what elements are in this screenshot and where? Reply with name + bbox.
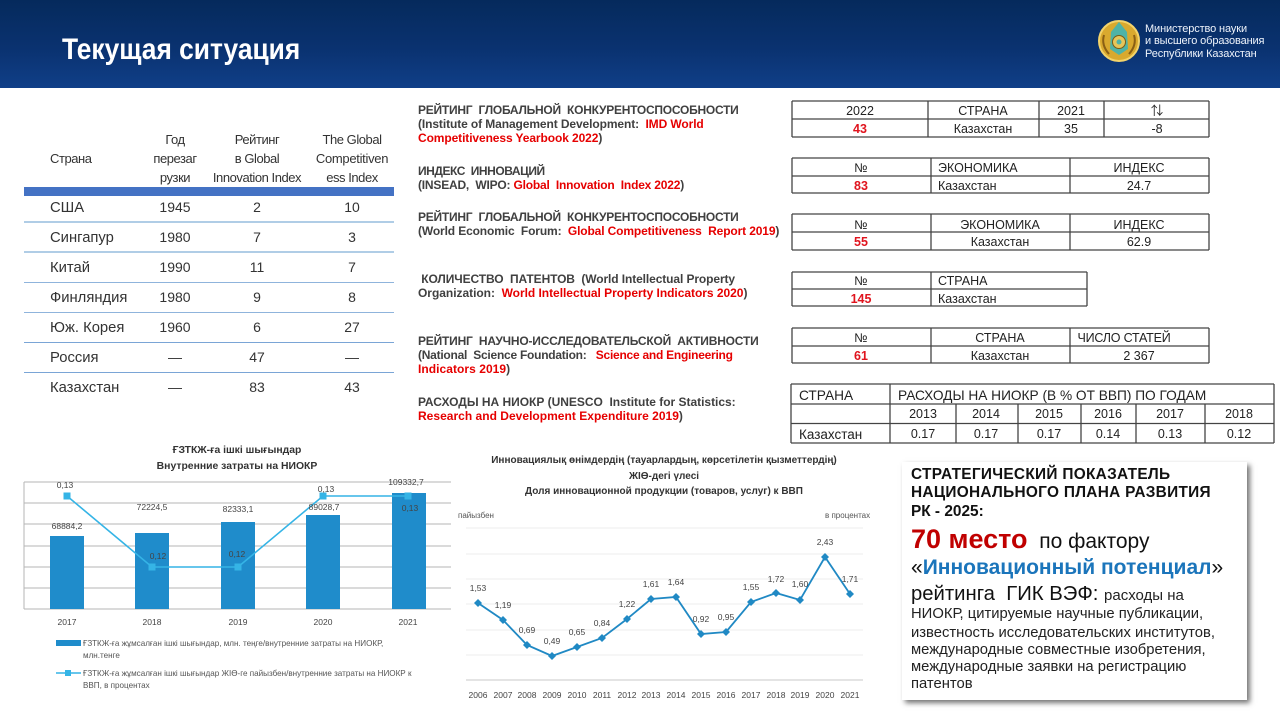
table header bbox=[50, 132, 388, 185]
axis years: 2012 bbox=[618, 690, 637, 700]
chart legend: ВВП, в процентах bbox=[83, 681, 150, 690]
text: Казахстан bbox=[938, 179, 997, 193]
row: South Korea: 27 bbox=[344, 319, 360, 335]
ministry name: и высшего образования bbox=[1145, 35, 1264, 47]
data labels: 1,72 bbox=[768, 574, 785, 584]
row: Finland: 1980 bbox=[159, 289, 191, 305]
data labels: 1,53 bbox=[470, 583, 487, 593]
text: 2015 bbox=[1035, 407, 1063, 421]
text: 55 bbox=[854, 235, 868, 249]
row: China: 7 bbox=[348, 259, 356, 275]
data labels: 0,12 bbox=[229, 549, 246, 559]
icon: state emblem bbox=[1098, 20, 1140, 62]
row: Russia: — bbox=[345, 349, 359, 365]
axis years: 2006 bbox=[469, 690, 488, 700]
axis years: 2011 bbox=[593, 690, 611, 700]
callout heading: НАЦИОНАЛЬНОГО ПЛАНА РАЗВИТИЯ bbox=[911, 484, 1211, 501]
data labels: 1,22 bbox=[619, 599, 636, 609]
data labels: 0,49 bbox=[544, 636, 561, 646]
text: 2014 bbox=[972, 407, 1000, 421]
row: China: 1990 bbox=[159, 259, 191, 275]
row: Russia: 47 bbox=[249, 349, 265, 365]
row: Singapore: 1980 bbox=[159, 229, 191, 245]
table header: ess Index bbox=[326, 170, 378, 185]
text block: IMD ranking: РЕЙТИНГ ГЛОБАЛЬНОЙ КОНКУРЕНТОСПОСОБНОСТИ bbox=[418, 103, 739, 117]
text: Казахстан bbox=[799, 427, 862, 442]
data labels bbox=[52, 477, 424, 561]
text: 0.12 bbox=[1227, 427, 1251, 441]
text block: innovation index bbox=[418, 164, 684, 192]
row: Kazakhstan bbox=[50, 379, 360, 396]
data labels: 1,71 bbox=[842, 574, 859, 584]
data labels: 89028,7 bbox=[309, 502, 340, 512]
table header: Competitiven bbox=[316, 151, 388, 166]
row: Singapore bbox=[50, 229, 356, 246]
data labels: 0,84 bbox=[594, 618, 611, 628]
text: 0.17 bbox=[911, 427, 935, 441]
row: USA bbox=[50, 199, 360, 216]
text block: WEF ranking bbox=[418, 210, 779, 238]
text: Казахстан bbox=[971, 349, 1029, 363]
table: patents bbox=[791, 271, 1088, 307]
data labels: 0,12 bbox=[150, 551, 167, 561]
callout description: международные совместные изобретения, bbox=[911, 642, 1206, 658]
row: China: 11 bbox=[250, 259, 264, 275]
data labels: 1,19 bbox=[495, 600, 512, 610]
axis years: 2019 bbox=[229, 617, 248, 627]
row: Russia: — bbox=[168, 349, 182, 365]
row: South Korea: 1960 bbox=[159, 319, 191, 335]
row: South Korea: Юж. Корея bbox=[50, 320, 124, 336]
text: 0.17 bbox=[1037, 427, 1061, 441]
text: 2022 bbox=[846, 104, 874, 118]
chart legend: ҒЗТКЖ-ға жұмсалған ішкі шығындар, млн. теңге/внутренние затраты на НИОКР, bbox=[83, 639, 383, 648]
table header: Год bbox=[165, 132, 185, 147]
axis years: 2018 bbox=[143, 617, 162, 627]
text: ЧИСЛО СТАТЕЙ bbox=[1077, 330, 1171, 345]
table header: Страна bbox=[50, 151, 92, 166]
row: Singapore: 3 bbox=[348, 229, 356, 245]
text block: innovation index: ИНДЕКС ИННОВАЦИЙ bbox=[418, 164, 545, 178]
row: Finland: 9 bbox=[253, 289, 261, 305]
ministry name: Министерство науки bbox=[1145, 23, 1247, 35]
text: ИНДЕКС bbox=[1114, 218, 1164, 232]
text: СТРАНА bbox=[958, 104, 1008, 118]
row: Finland: Финляндия bbox=[50, 290, 127, 306]
data labels bbox=[470, 537, 859, 646]
text: Казахстан bbox=[938, 292, 997, 306]
chart legend: ҒЗТКЖ-ға жұмсалған ішкі шығындар ЖІӨ-ге пайызбен/внутренние затраты на НИОКР к bbox=[83, 669, 412, 678]
text block: research activity: (National Science Foundation: Science and Engineering bbox=[418, 348, 733, 362]
data line bbox=[474, 553, 854, 660]
callout description bbox=[911, 583, 1215, 692]
text: -8 bbox=[1151, 122, 1163, 136]
row: USA: 10 bbox=[344, 199, 360, 215]
axis years: 2017 bbox=[742, 690, 761, 700]
text: 24.7 bbox=[1127, 179, 1151, 193]
data labels: 1,55 bbox=[743, 582, 760, 592]
line chart: share of innovative products in GDP bbox=[458, 455, 870, 700]
text block: R&D spending bbox=[418, 395, 736, 423]
table: IMD bbox=[791, 100, 1210, 138]
table header: в Global bbox=[235, 151, 279, 166]
axis years: 2021 bbox=[399, 617, 418, 627]
text block: WEF ranking: РЕЙТИНГ ГЛОБАЛЬНОЙ КОНКУРЕНТОСПОСОБНОСТИ bbox=[418, 210, 739, 224]
chart title: ҒЗТКЖ-ға ішкі шығындар bbox=[173, 445, 301, 456]
text: 35 bbox=[1064, 122, 1078, 136]
text block: WEF ranking: (World Economic Forum: Global Competitiveness Report 2019) bbox=[418, 224, 779, 238]
axis years: 2007 bbox=[494, 690, 513, 700]
row: USA: 1945 bbox=[159, 199, 191, 215]
axis years: 2017 bbox=[58, 617, 77, 627]
data labels: 82333,1 bbox=[223, 504, 254, 514]
text: 2018 bbox=[1225, 407, 1253, 421]
chart legend bbox=[56, 639, 412, 690]
data labels: 0,69 bbox=[519, 625, 536, 635]
data labels: 2,43 bbox=[817, 537, 834, 547]
text: 62.9 bbox=[1127, 235, 1151, 249]
table header: The Global bbox=[322, 132, 382, 147]
row: Finland: 8 bbox=[348, 289, 356, 305]
callout description: рейтинга ГИК ВЭФ: расходы на bbox=[911, 583, 1184, 605]
text block: research activity bbox=[418, 334, 759, 376]
data labels: 0,92 bbox=[693, 614, 710, 624]
text: 2021 bbox=[1057, 104, 1085, 118]
axis years: 2013 bbox=[642, 690, 661, 700]
text: Казахстан bbox=[954, 122, 1012, 136]
callout description: патентов bbox=[911, 676, 973, 692]
table: GII bbox=[791, 157, 1210, 194]
data labels: 1,64 bbox=[668, 577, 685, 587]
table: WEF bbox=[791, 213, 1210, 251]
chart legend: млн.тенге bbox=[83, 651, 120, 660]
axis years bbox=[58, 617, 418, 627]
data labels: 0,13 bbox=[402, 503, 419, 513]
table header: рузки bbox=[160, 170, 190, 185]
text block: innovation index: (INSEAD, WIPO: Global Innovation Index 2022) bbox=[418, 178, 684, 192]
text: 0.14 bbox=[1096, 427, 1120, 441]
data labels: 0,65 bbox=[569, 627, 586, 637]
text: ЭКОНОМИКА bbox=[960, 218, 1040, 232]
chart title: Внутренние затраты на НИОКР bbox=[157, 461, 317, 472]
ministry name bbox=[1145, 23, 1264, 60]
text: Казахстан bbox=[971, 235, 1029, 249]
header band bbox=[0, 0, 1280, 88]
text: РАСХОДЫ НА НИОКР (В % ОТ ВВП) ПО ГОДАМ bbox=[898, 388, 1206, 403]
text block: IMD ranking bbox=[418, 103, 739, 145]
callout heading: СТРАТЕГИЧЕСКИЙ ПОКАЗАТЕЛЬ bbox=[911, 466, 1170, 483]
bar and line chart: domestic R&D expenditure bbox=[24, 445, 451, 690]
text: 43 bbox=[853, 122, 867, 136]
text: № bbox=[854, 161, 868, 175]
text block: R&D spending: Research and Development Expenditure 2019) bbox=[418, 409, 683, 423]
text: № bbox=[854, 331, 868, 345]
row: Kazakhstan: — bbox=[168, 379, 182, 395]
row: South Korea bbox=[50, 319, 360, 336]
chart title: ЖІӨ-дегі үлесі bbox=[628, 471, 699, 482]
callout description: международные заявки на регистрацию bbox=[911, 659, 1186, 675]
bars bbox=[50, 493, 426, 609]
row: Singapore: Сингапур bbox=[50, 230, 114, 246]
axis years: 2010 bbox=[568, 690, 587, 700]
row: USA: США bbox=[50, 200, 84, 216]
axis years: 2008 bbox=[518, 690, 537, 700]
data labels: 0,13 bbox=[318, 484, 335, 494]
text: № bbox=[854, 218, 868, 232]
data labels: 0,13 bbox=[57, 480, 74, 490]
chart title: Инновациялық өнімдердің (тауарлардың, көрсетілетін қызметтердің) bbox=[491, 455, 837, 466]
row: Kazakhstan: 83 bbox=[249, 379, 265, 395]
axis years: 2009 bbox=[543, 690, 562, 700]
row: Russia: Россия bbox=[50, 350, 99, 366]
row: Kazakhstan: Казахстан bbox=[50, 380, 119, 396]
unit labels: в процентах bbox=[825, 511, 870, 520]
text: 2016 bbox=[1094, 407, 1122, 421]
data labels: 109332,7 bbox=[388, 477, 424, 487]
callout heading: РК - 2025: bbox=[911, 503, 984, 520]
text block: patents bbox=[418, 272, 747, 300]
unit labels: пайызбен bbox=[458, 511, 494, 520]
row: China bbox=[50, 259, 356, 276]
axis years: 2020 bbox=[314, 617, 333, 627]
text block: research activity: Indicators 2019) bbox=[418, 362, 510, 376]
text: 2 367 bbox=[1123, 349, 1155, 363]
text: СТРАНА bbox=[938, 274, 988, 288]
axis years: 2016 bbox=[717, 690, 736, 700]
text: 83 bbox=[854, 179, 868, 193]
text: 2017 bbox=[1156, 407, 1184, 421]
text: СТРАНА bbox=[799, 388, 854, 403]
text: 145 bbox=[851, 292, 871, 306]
table header: перезаг bbox=[153, 151, 197, 166]
text: ⇅ bbox=[1151, 104, 1163, 118]
callout description: известность исследовательских институтов, bbox=[911, 625, 1215, 641]
chart title: Доля инновационной продукции (товаров, услуг) к ВВП bbox=[525, 486, 803, 497]
text: 0.17 bbox=[974, 427, 998, 441]
ministry name: Республики Казахстан bbox=[1145, 48, 1257, 60]
text: ИНДЕКС bbox=[1114, 161, 1164, 175]
unit labels bbox=[458, 511, 870, 520]
text block: patents: КОЛИЧЕСТВО ПАТЕНТОВ (World Intellectual Property bbox=[421, 272, 735, 286]
row: Russia bbox=[50, 349, 359, 366]
data labels: 1,60 bbox=[792, 579, 809, 589]
table header: Рейтинг bbox=[235, 132, 279, 147]
text block: patents: Organization: World Intellectual Property Indicators 2020) bbox=[418, 286, 747, 300]
text: 0.13 bbox=[1158, 427, 1182, 441]
callout factor name: «Инновационный потенциал» bbox=[911, 556, 1223, 579]
chart title bbox=[157, 445, 317, 472]
callout: strategic indicator bbox=[902, 462, 1247, 700]
table header: Innovation Index bbox=[213, 170, 301, 185]
row: Singapore: 7 bbox=[253, 229, 261, 245]
title: Текущая ситуация bbox=[62, 33, 300, 66]
callout heading bbox=[911, 464, 1211, 520]
data labels: 72224,5 bbox=[137, 502, 168, 512]
text block: IMD ranking: (Institute of Management Development: IMD World bbox=[418, 117, 704, 131]
callout target: 70th place: 70 место по фактору bbox=[911, 524, 1150, 554]
axis years: 2020 bbox=[816, 690, 835, 700]
text: СТРАНА bbox=[975, 331, 1025, 345]
text block: R&D spending: РАСХОДЫ НА НИОКР (UNESCO Institute for Statistics: bbox=[418, 395, 736, 409]
text: 61 bbox=[854, 349, 868, 363]
data labels: 68884,2 bbox=[52, 521, 83, 531]
axis years bbox=[469, 690, 860, 700]
axis years: 2015 bbox=[692, 690, 711, 700]
axis years: 2014 bbox=[667, 690, 686, 700]
data labels: 0,95 bbox=[718, 612, 735, 622]
chart title bbox=[491, 455, 837, 497]
line series bbox=[64, 492, 412, 570]
text block: research activity: РЕЙТИНГ НАУЧНО-ИССЛЕДОВАТЕЛЬСКОЙ АКТИВНОСТИ bbox=[418, 334, 759, 348]
text: № bbox=[854, 274, 868, 288]
text: 2013 bbox=[909, 407, 937, 421]
axis years: 2021 bbox=[841, 690, 860, 700]
row: Kazakhstan: 43 bbox=[344, 379, 360, 395]
table: R&D spending by year bbox=[790, 383, 1275, 444]
panel: country comparison table bbox=[24, 132, 394, 396]
table: research bbox=[791, 327, 1210, 364]
data labels: 1,61 bbox=[643, 579, 660, 589]
row: China: Китай bbox=[50, 260, 90, 276]
row: Finland bbox=[50, 289, 356, 306]
text: ЭКОНОМИКА bbox=[938, 161, 1018, 175]
axis years: 2018 bbox=[767, 690, 786, 700]
text block: IMD ranking: Competitiveness Yearbook 2022) bbox=[418, 131, 602, 145]
row: South Korea: 6 bbox=[253, 319, 261, 335]
axis years: 2019 bbox=[791, 690, 810, 700]
callout description: НИОКР, цитируемые научные публикации, bbox=[911, 606, 1203, 622]
row: USA: 2 bbox=[253, 199, 261, 215]
